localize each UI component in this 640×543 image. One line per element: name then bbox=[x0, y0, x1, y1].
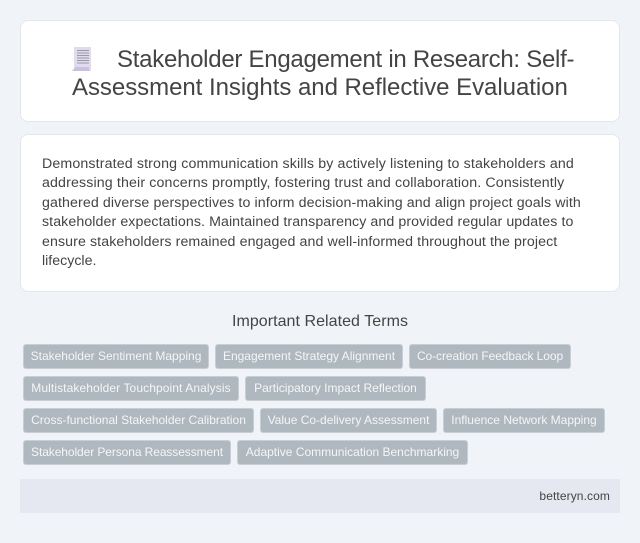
tag bbox=[245, 376, 426, 401]
summary text: stakeholder expectations. Maintained transparency and provided regular updates to bbox=[42, 214, 573, 230]
footer site name: betteryn.com bbox=[539, 488, 610, 502]
title bbox=[72, 46, 574, 101]
tag bbox=[215, 344, 403, 369]
tag: Value Co-delivery Assessment bbox=[268, 413, 429, 427]
footer bar bbox=[20, 479, 620, 513]
tag bbox=[23, 344, 209, 369]
title: Stakeholder Engagement in Research: Self- bbox=[117, 46, 574, 73]
tag: Co-creation Feedback Loop bbox=[417, 349, 563, 363]
panel: summary card bbox=[20, 134, 620, 292]
tag bbox=[23, 376, 239, 401]
summary text bbox=[42, 156, 581, 269]
tag bbox=[409, 344, 571, 369]
tag: Multistakeholder Touchpoint Analysis bbox=[31, 381, 231, 395]
summary text: gathered diverse perspectives to inform decision-making and align project goals with bbox=[42, 195, 581, 211]
tag bbox=[23, 440, 231, 465]
tag bbox=[260, 408, 437, 433]
tag bbox=[237, 440, 468, 465]
tag list bbox=[23, 344, 605, 465]
panel: header card bbox=[20, 20, 620, 122]
tag: Cross-functional Stakeholder Calibration bbox=[31, 413, 246, 427]
icon: document scroll bbox=[72, 47, 91, 71]
title: Assessment Insights and Reflective Evaluation bbox=[72, 74, 568, 101]
tag: Adaptive Communication Benchmarking bbox=[246, 445, 459, 459]
tag bbox=[443, 408, 605, 433]
tag: Stakeholder Persona Reassessment bbox=[31, 445, 223, 459]
summary text: ensure stakeholders remained engaged and well-informed throughout the project bbox=[42, 234, 557, 250]
tag bbox=[23, 408, 254, 433]
tag: Engagement Strategy Alignment bbox=[223, 349, 395, 363]
summary text: addressing their concerns promptly, fostering trust and collaboration. Consistently bbox=[42, 175, 564, 191]
summary text: lifecycle. bbox=[42, 253, 96, 269]
tag: Influence Network Mapping bbox=[451, 413, 597, 427]
summary text: Demonstrated strong communication skills by actively listening to stakeholders and bbox=[42, 156, 574, 172]
tag: Stakeholder Sentiment Mapping bbox=[31, 349, 201, 363]
tag: Participatory Impact Reflection bbox=[254, 381, 417, 395]
heading: related terms: Important Related Terms bbox=[232, 313, 408, 330]
